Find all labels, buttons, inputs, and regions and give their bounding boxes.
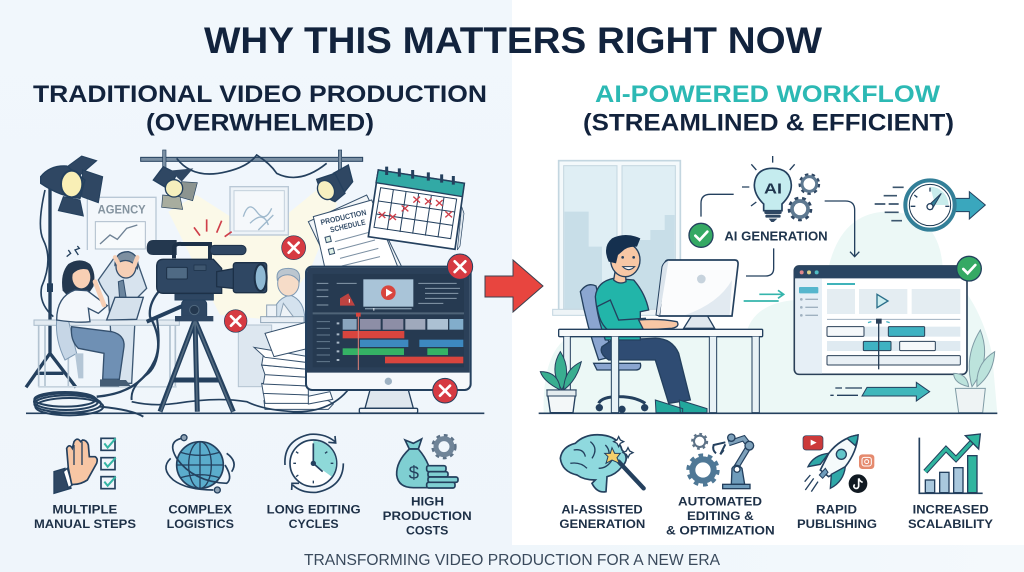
labels: COMPLEX xyxy=(168,503,233,517)
labels: RAPID xyxy=(816,503,857,517)
heading: traditional production: TRADITIONAL VIDEO PRODUCTION xyxy=(33,81,487,108)
heading: AI-powered workflow: (STREAMLINED & EFFICIENT) xyxy=(583,110,954,136)
labels: AUTOMATED xyxy=(678,494,762,508)
title: WHY THIS MATTERS RIGHT NOW xyxy=(204,20,822,61)
AI bulb xyxy=(742,156,795,222)
row: traditional pain points xyxy=(34,434,472,538)
labels: MULTIPLE xyxy=(52,503,117,517)
editing monitor xyxy=(306,267,471,413)
overhead light left xyxy=(153,167,197,209)
labels: MANUAL STEPS xyxy=(34,517,136,531)
labels: LONG EDITING xyxy=(267,503,361,517)
connector lines xyxy=(701,194,859,276)
labels: EDITING & xyxy=(687,509,754,523)
check badge xyxy=(689,223,713,247)
studio light: stand xyxy=(26,156,103,387)
agency poster: AGENCY xyxy=(98,202,146,216)
stressed woman xyxy=(56,246,131,387)
desk: agency team xyxy=(34,320,179,388)
panel: traditional production illustration xyxy=(26,150,484,417)
motion arrows xyxy=(744,290,784,301)
labels: COSTS xyxy=(406,524,448,538)
third person xyxy=(238,268,305,387)
heading: AI-powered workflow xyxy=(583,81,954,136)
lighting rail xyxy=(141,150,363,177)
row: AI benefits xyxy=(559,434,994,538)
labels: PUBLISHING xyxy=(797,517,877,531)
heading: AI-powered workflow: AI-POWERED WORKFLOW xyxy=(595,81,941,108)
schedule paper: PRODUCTION xyxy=(320,208,368,227)
laptop xyxy=(107,297,143,320)
person at desk xyxy=(580,235,707,413)
calendar xyxy=(368,167,464,250)
icon: globe with orbits xyxy=(166,435,234,493)
label: AI generation: AI GENERATION xyxy=(724,229,828,243)
heading: traditional production xyxy=(33,81,487,136)
speed arrow xyxy=(830,382,930,401)
AI bulb: AI xyxy=(764,181,782,197)
red X badges xyxy=(224,236,473,403)
schedule paper: SCHEDULE xyxy=(329,218,366,234)
wall picture xyxy=(230,187,288,235)
labels: AI-ASSISTED xyxy=(561,503,643,517)
labels: HIGH xyxy=(411,494,444,508)
schedule paper xyxy=(308,195,402,273)
editor window xyxy=(794,266,967,374)
labels xyxy=(34,494,472,538)
gears xyxy=(789,175,819,220)
icon: clock xyxy=(285,434,343,492)
labels: PRODUCTION xyxy=(383,509,472,523)
light beams xyxy=(168,190,337,320)
icon: gears and robot arm xyxy=(688,434,754,489)
labels: LOGISTICS xyxy=(167,517,234,531)
cables xyxy=(34,290,358,417)
icon: money bag: $ xyxy=(409,462,420,483)
video camera on tripod xyxy=(147,219,267,412)
icon: brain with wand xyxy=(560,435,644,492)
heading: traditional production: (OVERWHELMED) xyxy=(146,110,374,136)
panel: AI workflow illustration xyxy=(539,156,997,413)
icon: rocket and social xyxy=(803,435,874,493)
agency poster xyxy=(87,197,156,250)
arrow: transition xyxy=(485,260,543,312)
stressed man xyxy=(98,252,147,383)
window xyxy=(553,161,682,315)
ground line xyxy=(539,411,997,416)
labels: & OPTIMIZATION xyxy=(666,524,775,538)
desk monitor xyxy=(656,260,738,328)
icon: money bag xyxy=(397,436,458,488)
plant left xyxy=(540,352,581,413)
labels: INCREASED xyxy=(913,503,989,517)
labels: SCALABILITY xyxy=(908,517,994,531)
mint backdrop xyxy=(544,212,997,413)
check badge: window xyxy=(957,256,981,281)
overhead light right xyxy=(314,165,353,203)
labels: CYCLES xyxy=(289,517,339,531)
paper stack xyxy=(254,322,333,409)
desk xyxy=(559,329,763,413)
icon: hand and checklist xyxy=(54,438,116,493)
labels xyxy=(559,494,994,538)
labels: GENERATION xyxy=(559,517,645,531)
speedometer xyxy=(875,180,985,230)
ground line xyxy=(26,411,484,416)
plant right xyxy=(954,330,995,413)
icon: growth chart xyxy=(919,434,983,493)
footer tagline: TRANSFORMING VIDEO PRODUCTION FOR A NEW ERA xyxy=(304,552,721,569)
